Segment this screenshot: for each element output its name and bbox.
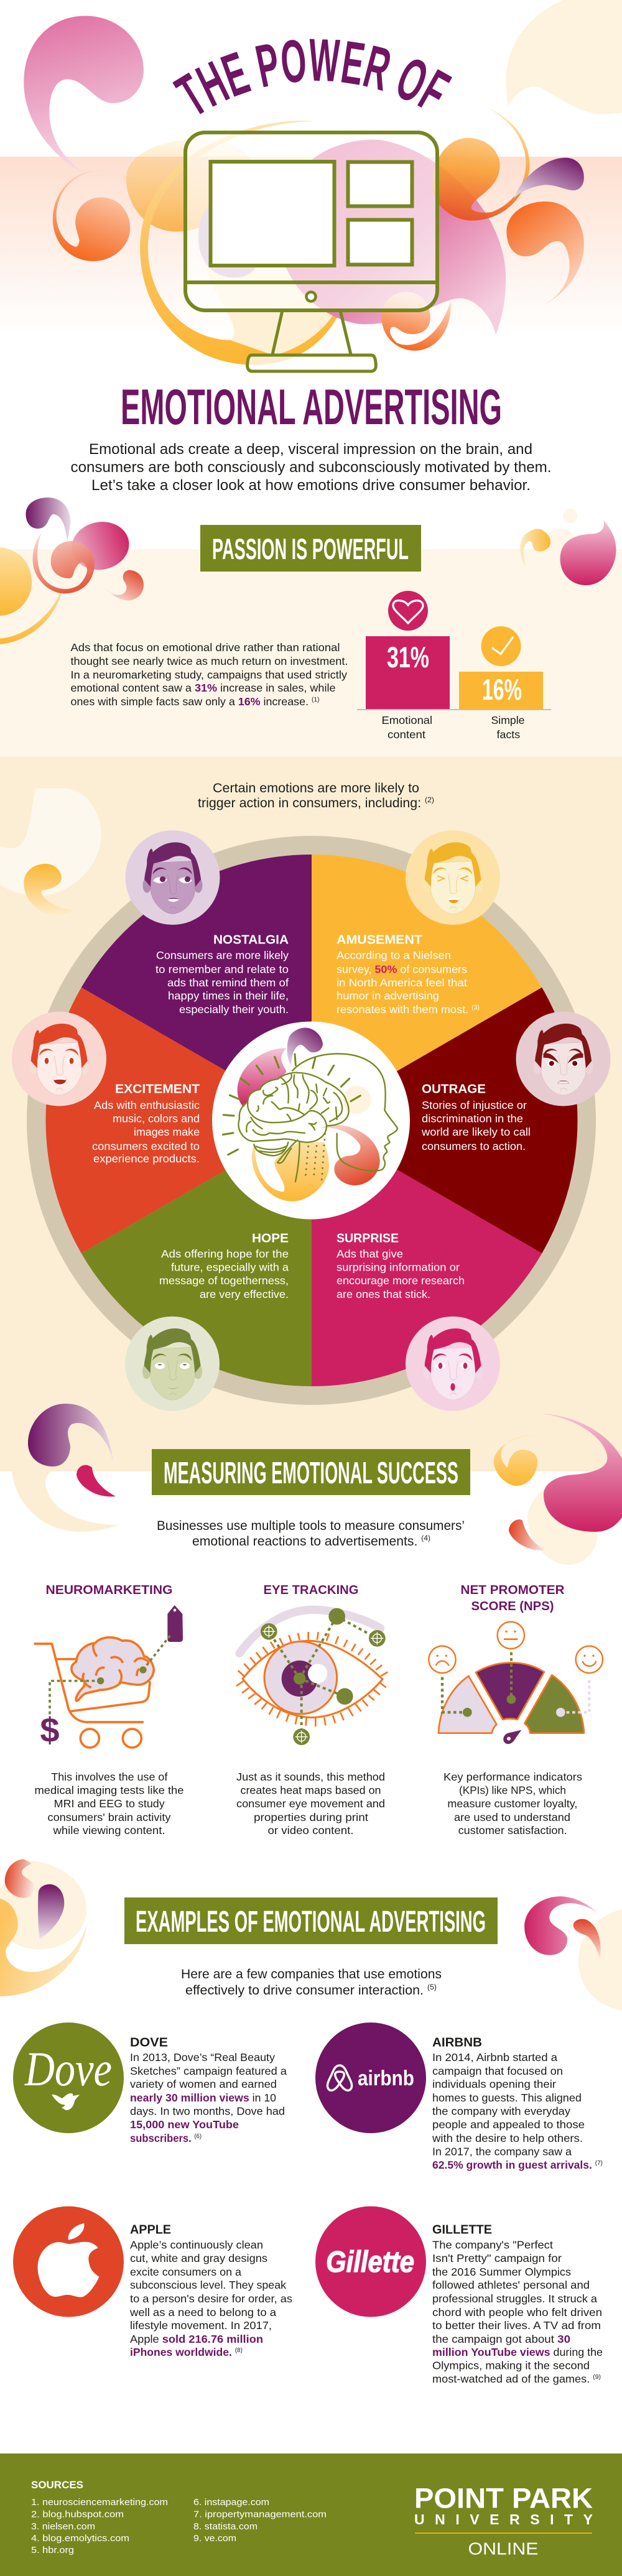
- segment: hope: [81, 1121, 312, 1386]
- heading: net promoter score: NET PROMOTER: [460, 1583, 565, 1597]
- sources list: 9. ve.com: [193, 2533, 236, 2544]
- heading: measuring emotional success: [152, 1449, 470, 1495]
- hero decorative swirls: [24, 0, 622, 365]
- text: surprise: surprising information or: [337, 1261, 460, 1274]
- measuring intro text: [157, 1519, 465, 1549]
- passion body text: In a neuromarketing study, campaigns that used strictly: [71, 669, 347, 681]
- text: apple: Apple sold 216.76 million: [130, 2333, 263, 2345]
- logo: apple: [13, 2207, 124, 2317]
- description: neuromarketing: [35, 1771, 184, 1837]
- text: hope: Ads offering hope for the: [161, 1248, 289, 1260]
- description: neuromarketing: consumers' brain activity: [47, 1811, 171, 1823]
- text: nostalgia: NOSTALGIA: [213, 933, 289, 947]
- description: eye tracking: consumer eye movement and: [236, 1797, 385, 1810]
- text: amusement: [337, 933, 480, 1016]
- text: outrage: OUTRAGE: [422, 1082, 486, 1096]
- measuring intro text: emotional reactions to advertisements.: [192, 1534, 416, 1549]
- bar labels: [382, 714, 525, 741]
- text: apple: (8): [235, 2347, 243, 2354]
- text: apple: [129, 2223, 292, 2358]
- logo: gillette: [315, 2207, 426, 2317]
- text: gillette: Olympics, making it the second: [432, 2360, 590, 2372]
- logo: dove: Dove: [24, 2042, 112, 2096]
- text: amusement: in North America feel that: [337, 976, 467, 989]
- icon: heart: [388, 591, 428, 631]
- text: apple: iPhones worldwide.: [130, 2346, 232, 2358]
- text: apple: to a person's desire for order, as: [130, 2292, 292, 2305]
- text: airbnb: with the desire to help others.: [432, 2132, 583, 2144]
- text: outrage: consumers to action.: [422, 1140, 526, 1152]
- passion body text: thought see nearly twice as much return on investment.: [71, 655, 348, 667]
- text: airbnb: (7): [595, 2160, 603, 2167]
- text: outrage: discrimination in the: [422, 1112, 523, 1124]
- text: apple: APPLE: [130, 2223, 171, 2236]
- logo: gillette: Gillette: [326, 2246, 414, 2279]
- description: eye tracking: properties during print: [254, 1811, 368, 1823]
- emotions intro text: [198, 781, 434, 810]
- text: dove: days. In two months, Dove had: [130, 2105, 285, 2117]
- segment: outrage: [312, 988, 578, 1253]
- text: gillette: the campaign got about 30: [432, 2333, 570, 2345]
- text: gillette: to better their lives. A TV ad from: [432, 2319, 601, 2332]
- sources list: 4. blog.emolytics.com: [31, 2533, 129, 2544]
- column: net promoter score: [429, 1583, 603, 1837]
- text: gillette: The company's "Perfect: [432, 2238, 553, 2251]
- text: nostalgia: to remember and relate to: [156, 963, 289, 975]
- heading: passion is powerful: [200, 525, 421, 572]
- column: eye tracking: [236, 1583, 388, 1837]
- examples intro text: effectively to drive consumer interaction.: [185, 1983, 418, 1998]
- description: net promoter score: are used to understand: [454, 1811, 570, 1823]
- bar labels: Simple: [491, 714, 525, 726]
- emotion wheel: [27, 836, 596, 1405]
- text: gillette: million YouTube views during the: [432, 2346, 603, 2358]
- face: amusement: [406, 830, 500, 925]
- icon: shopping cart with brain: [35, 1605, 183, 1748]
- text: apple: subconscious level. They speak: [130, 2279, 286, 2291]
- text: nostalgia: Consumers are more likely: [156, 949, 289, 961]
- text: surprise: Ads that give: [337, 1248, 403, 1260]
- text: surprise: encourage more research: [337, 1274, 465, 1287]
- text: airbnb: individuals opening their: [432, 2078, 556, 2090]
- sources list: 7. ipropertymanagement.com: [193, 2509, 327, 2520]
- text: hope: HOPE: [252, 1231, 289, 1245]
- description: neuromarketing: medical imaging tests like the: [35, 1784, 184, 1797]
- text: airbnb: homes to guests. This aligned: [432, 2092, 582, 2104]
- sources list: 3. nielsen.com: [31, 2521, 95, 2532]
- text: gillette: (9): [593, 2374, 601, 2381]
- text: apple: excite consumers on a: [130, 2266, 241, 2278]
- measuring intro text: Businesses use multiple tools to measure consumers’: [157, 1519, 465, 1533]
- text: amusement: survey, 50% of consumers: [337, 963, 467, 975]
- text: outrage: world are likely to call: [421, 1126, 531, 1138]
- bar labels: facts: [496, 728, 520, 741]
- text: gillette: chord with people who felt driven: [432, 2306, 602, 2319]
- text: airbnb: 62.5% growth in guest arrivals.: [432, 2159, 592, 2171]
- text: apple: well as a need to belong to a: [129, 2306, 276, 2319]
- text: airbnb: campaign that focused on: [432, 2065, 563, 2077]
- face: hope: [125, 1317, 220, 1411]
- passion body text: ones with simple facts saw only a 16% increase.: [71, 695, 307, 708]
- sources list: 6. instapage.com: [193, 2497, 269, 2508]
- description: net promoter score: (KPIs) like NPS, which: [459, 1784, 566, 1797]
- icon: desktop monitor: [185, 132, 437, 371]
- heading: passion is powerful: PASSION IS POWERFUL: [212, 532, 409, 565]
- examples section right swirls: [524, 1896, 622, 2011]
- text: excitement: music, colors and: [113, 1112, 200, 1124]
- text: apple: cut, white and gray designs: [130, 2252, 267, 2264]
- heading: neuromarketing: NEUROMARKETING: [46, 1583, 173, 1597]
- text: hope: [159, 1231, 289, 1300]
- text: dove: 15,000 new YouTube: [130, 2118, 239, 2131]
- bar: emotional content 31%: 31%: [387, 641, 429, 674]
- text: hope: future, especially with a: [171, 1261, 289, 1274]
- icon: satisfaction gauge: [429, 1622, 603, 1744]
- text: airbnb: In 2017, the company saw a: [432, 2146, 572, 2158]
- bar: emotional content 31%: [366, 636, 450, 709]
- text: dove: subscribers.: [130, 2132, 192, 2144]
- sources list: [31, 2480, 327, 2555]
- examples intro text: (5): [427, 1983, 437, 1991]
- text: dove: DOVE: [130, 2035, 168, 2050]
- text: apple: lifestyle movement. In 2017,: [130, 2319, 272, 2332]
- segment: nostalgia: [81, 855, 312, 1121]
- text: amusement: (3): [471, 1004, 480, 1011]
- text: amusement: According to a Nielsen: [337, 949, 451, 961]
- text: gillette: [432, 2223, 603, 2385]
- text: gillette: the 2016 Summer Olympics: [432, 2266, 571, 2278]
- emotions intro text: Certain emotions are more likely to: [213, 781, 419, 795]
- text: airbnb: the company with everyday: [432, 2105, 570, 2117]
- text: surprise: are ones that stick.: [337, 1288, 430, 1300]
- text: excitement: EXCITEMENT: [115, 1082, 200, 1096]
- text: gillette: professional struggles. It struck a: [432, 2292, 597, 2305]
- measuring section left swirls: [12, 1404, 119, 1532]
- description: net promoter score: [443, 1771, 582, 1837]
- face: surprise: [406, 1317, 500, 1411]
- icon: eye with tracking points: [236, 1608, 388, 1745]
- footer panel: [0, 2453, 622, 2576]
- text: airbnb: AIRBNB: [432, 2035, 482, 2050]
- text: gillette: most-watched ad of the games.: [432, 2373, 584, 2385]
- sources list: SOURCES: [31, 2480, 83, 2491]
- sources list: 5. hbr.org: [31, 2545, 74, 2555]
- text: amusement: AMUSEMENT: [337, 933, 422, 947]
- text: dove: In 2013, Dove’s “Real Beauty: [130, 2051, 275, 2064]
- bar labels: Emotional: [382, 714, 432, 726]
- logo: airbnb: [315, 2022, 426, 2133]
- sources list: 8. statista.com: [193, 2521, 258, 2532]
- text: outrage: Stories of injustice or: [422, 1099, 527, 1111]
- background bands: [0, 157, 622, 1471]
- text: excitement: [92, 1082, 200, 1165]
- passion section left swirls: [0, 498, 144, 644]
- passion section right swirls: [520, 509, 616, 585]
- intro paragraph: Emotional ads create a deep, visceral impression on the brain, and: [89, 441, 532, 458]
- icon: check mark: [481, 626, 521, 666]
- intro paragraph: Let’s take a closer look at how emotions drive consumer behavior.: [91, 477, 531, 494]
- description: eye tracking: [236, 1771, 385, 1837]
- title: the power of: THE POWER OF: [172, 39, 452, 114]
- description: eye tracking: Just as it sounds, this method: [236, 1771, 385, 1783]
- measuring intro text: (4): [421, 1534, 430, 1542]
- text: surprise: [337, 1231, 465, 1300]
- logo: point park university online: UNIVERSITY: [414, 2511, 593, 2527]
- description: neuromarketing: while viewing content.: [52, 1824, 165, 1837]
- bar: simple facts 16%: 16%: [482, 673, 522, 706]
- text: nostalgia: ads that remind them of: [167, 976, 289, 989]
- text: amusement: resonates with them most.: [337, 1003, 463, 1016]
- text: hope: are very effective.: [200, 1288, 289, 1300]
- sources list: 1. neurosciencemarketing.com: [31, 2497, 168, 2508]
- column: neuromarketing: [35, 1583, 184, 1837]
- examples intro text: [181, 1967, 442, 1998]
- logo: point park university online: [414, 2483, 593, 2559]
- logo: airbnb: airbnb: [358, 2067, 414, 2090]
- text: excitement: consumers excited to: [92, 1140, 200, 1152]
- examples intro text: Here are a few companies that use emotions: [181, 1967, 442, 1981]
- examples section left swirls: [0, 1859, 86, 1996]
- text: hope: message of togetherness,: [159, 1274, 289, 1287]
- emotions intro text: trigger action in consumers, including:: [198, 796, 417, 810]
- passion body text: Ads that focus on emotional drive rather than rational: [71, 641, 340, 654]
- heading: examples of emotional advertising: [124, 1897, 498, 1944]
- icon: dollar sign: $: [40, 1710, 60, 1749]
- sources list: 2. blog.hubspot.com: [31, 2509, 124, 2520]
- logo: point park university online: ONLINE: [468, 2539, 539, 2559]
- text: nostalgia: [156, 933, 289, 1016]
- description: net promoter score: customer satisfaction.: [458, 1824, 567, 1837]
- text: excitement: experience products.: [93, 1152, 200, 1165]
- passion body text: emotional content saw a 31% increase in sales, while: [71, 682, 336, 694]
- heading: net promoter score: [460, 1583, 565, 1613]
- text: gillette: GILLETTE: [432, 2223, 492, 2236]
- text: outrage: [421, 1082, 531, 1152]
- emotions section swirls: [0, 789, 101, 914]
- text: airbnb: [432, 2035, 603, 2171]
- text: excitement: Ads with enthusiastic: [94, 1099, 200, 1111]
- text: nostalgia: happy times in their life,: [168, 989, 289, 1002]
- intro paragraph: consumers are both consciously and subconsciously motivated by them.: [71, 459, 551, 476]
- text: gillette: followed athletes' personal and: [432, 2279, 590, 2291]
- face: excitement: [12, 1011, 106, 1106]
- icon: brain in head profile: [223, 1028, 397, 1202]
- measuring section right swirls: [494, 1414, 622, 1565]
- text: dove: nearly 30 million views in 10: [130, 2092, 276, 2104]
- passion body text: (1): [312, 697, 320, 703]
- text: surprise: SURPRISE: [337, 1231, 399, 1245]
- text: excitement: images make: [134, 1126, 200, 1138]
- text: airbnb: people and appealed to those: [432, 2118, 585, 2131]
- logo: point park university online: POINT PARK: [414, 2483, 593, 2514]
- segment: amusement: [312, 855, 542, 1121]
- face: nostalgia: [125, 830, 220, 925]
- heading: eye tracking: EYE TRACKING: [264, 1583, 358, 1597]
- face: outrage: [516, 1011, 610, 1106]
- description: neuromarketing: This involves the use of: [51, 1771, 167, 1783]
- passion body text: [71, 641, 348, 708]
- description: eye tracking: creates heat maps based on: [240, 1784, 381, 1797]
- text: nostalgia: especially their youth.: [179, 1003, 289, 1016]
- text: apple: Apple’s continuously clean: [130, 2238, 263, 2251]
- emotions intro text: (2): [425, 795, 434, 804]
- description: neuromarketing: MRI and EEG to study: [54, 1797, 165, 1810]
- heading: net promoter score: SCORE (NPS): [471, 1599, 554, 1613]
- text: dove: variety of women and earned: [130, 2078, 277, 2090]
- text: gillette: Isn't Pretty" campaign for: [432, 2252, 562, 2264]
- bar: simple facts 16%: [459, 672, 543, 709]
- description: net promoter score: Key performance indicators: [443, 1771, 582, 1783]
- bar labels: content: [388, 728, 425, 741]
- text: dove: Sketches” campaign featured a: [130, 2065, 287, 2077]
- intro paragraph: [71, 441, 551, 494]
- logo: dove: [13, 2022, 124, 2133]
- segment: surprise: [312, 1121, 542, 1386]
- description: net promoter score: measure customer loyalty,: [447, 1797, 577, 1810]
- text: airbnb: In 2014, Airbnb started a: [432, 2051, 557, 2064]
- text: dove: [130, 2035, 287, 2144]
- segment: excitement: [45, 988, 312, 1253]
- text: dove: (6): [194, 2133, 202, 2140]
- text: amusement: humor in advertising: [337, 989, 439, 1002]
- bar chart: emotional content vs simple facts: [357, 591, 551, 741]
- description: eye tracking: or video content.: [267, 1824, 353, 1837]
